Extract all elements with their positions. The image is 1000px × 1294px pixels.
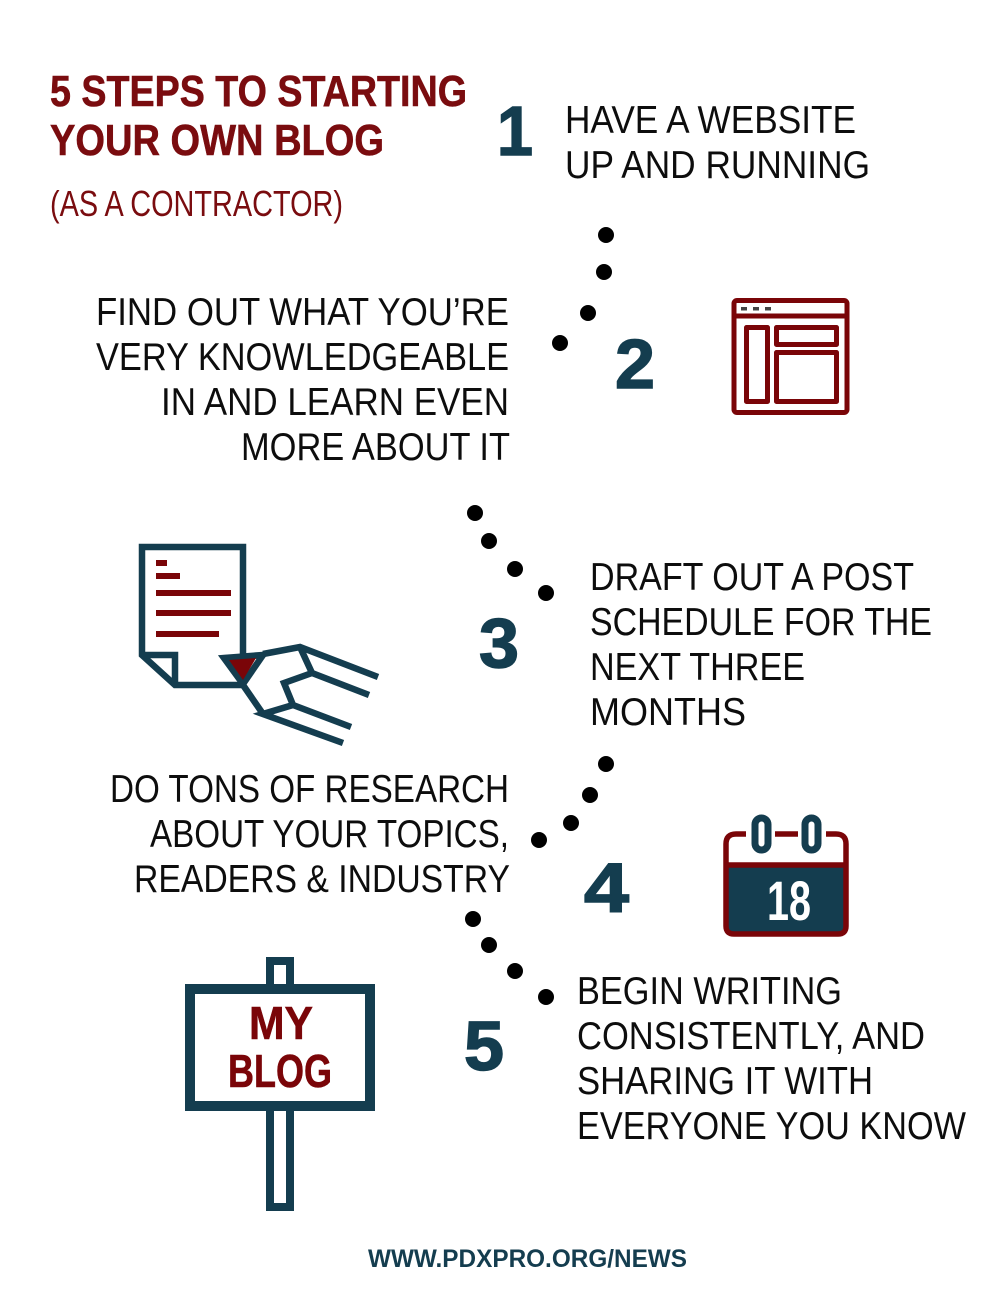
step 4 text [110, 768, 510, 901]
step 5 text: CONSISTENTLY, AND [577, 1015, 925, 1058]
icon: calendar: 18 [767, 869, 811, 932]
icon: my blog sign: MY [249, 997, 313, 1049]
dotted connector 3 to 4 [531, 756, 614, 848]
step 4 text: DO TONS OF RESEARCH [110, 768, 509, 811]
title: 5 STEPS TO STARTING [50, 67, 467, 116]
step 1 text: HAVE A WEBSITE [565, 99, 856, 142]
step 3 number: 3 [479, 604, 519, 682]
title: YOUR OWN BLOG [50, 116, 384, 165]
step 3 text: DRAFT OUT A POST [590, 556, 914, 599]
step 5 text: SHARING IT WITH [577, 1060, 873, 1103]
step 5 text: BEGIN WRITING [577, 970, 842, 1013]
step 2 text: FIND OUT WHAT YOU’RE [96, 291, 509, 334]
step 3 text: SCHEDULE FOR THE [590, 601, 932, 644]
step 3 text: NEXT THREE [590, 646, 805, 689]
icon: browser window [734, 300, 847, 412]
step 1 text: UP AND RUNNING [565, 144, 870, 187]
title [50, 67, 467, 165]
step 1 number: 1 [497, 92, 533, 170]
step 2 text: VERY KNOWLEDGEABLE [96, 336, 509, 379]
step 3 text [590, 556, 932, 734]
icon: calendar [726, 818, 846, 934]
step 2 text [96, 291, 510, 469]
step 2 number: 2 [615, 325, 655, 403]
dotted connector 2 to 3 [467, 505, 554, 601]
step 4 number: 4 [584, 849, 629, 927]
step 5 number: 5 [464, 1007, 504, 1085]
step 5 text [577, 970, 966, 1148]
step 2 text: MORE ABOUT IT [241, 426, 510, 469]
step 2 text: IN AND LEARN EVEN [161, 381, 509, 424]
dotted connector 1 to 2 [552, 227, 614, 351]
footer url: WWW.PDXPRO.ORG/NEWS [368, 1245, 687, 1273]
dotted connector 4 to 5 [465, 911, 554, 1005]
step 4 text: ABOUT YOUR TOPICS, [150, 813, 509, 856]
step 1 text [565, 99, 870, 187]
icon: my blog sign [190, 961, 370, 1207]
step 3 text: MONTHS [590, 691, 746, 734]
subtitle: (AS A CONTRACTOR) [50, 183, 343, 224]
step 4 text: READERS & INDUSTRY [134, 858, 510, 901]
icon: my blog sign: BLOG [228, 1045, 332, 1097]
icon: document and pen hand [142, 547, 378, 743]
